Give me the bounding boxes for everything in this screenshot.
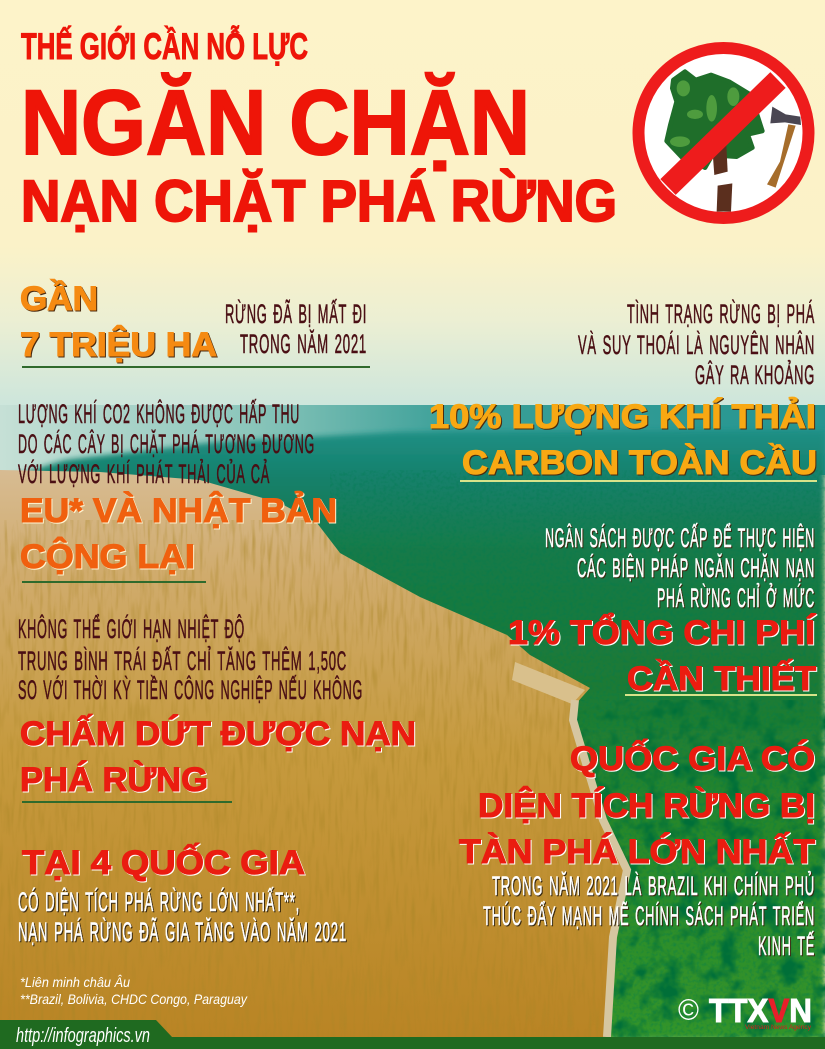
- logo: TTXVN: ©: [678, 994, 699, 1027]
- infographic canvas: NẠN PHÁ RỪNG ĐÃ GIA TĂNG VÀO NĂM 2021: [18, 916, 347, 947]
- stat: 4 countries: [18, 843, 347, 947]
- background: cleared field: [0, 460, 640, 1040]
- stat: 7 million ha: [20, 280, 370, 368]
- stat: 1 percent budget: [508, 522, 817, 698]
- stat: temperature limit: TRUNG BÌNH TRÁI ĐẤT CHỈ TĂNG THÊM 1,50C: [18, 644, 347, 676]
- title: [21, 25, 617, 234]
- stat: 7 million ha: 7 TRIỆU HA: [20, 326, 217, 364]
- stat: temperature limit: [18, 613, 416, 803]
- footnotes: *Liên minh châu Âu: [20, 974, 130, 990]
- logo: TTXVN: Vietnam News Agency: [745, 1025, 811, 1031]
- stat: Brazil: TÀN PHÁ LỚN NHẤT: [459, 833, 815, 871]
- icon: no deforestation sign: [638, 48, 808, 218]
- stat: CO2 equivalent: VỚI LƯỢNG KHÍ PHÁT THẢI CỦA CẢ: [18, 457, 270, 489]
- stat: temperature limit: PHÁ RỪNG: [20, 761, 208, 799]
- title line 3: NẠN CHẶT PHÁ RỪNG: [21, 169, 617, 234]
- stat: 7 million ha: GẦN: [20, 280, 98, 318]
- stat: 1 percent budget: CẦN THIẾT: [627, 660, 816, 698]
- logo: TTXVN: TTXVN: [709, 992, 812, 1029]
- stat: Brazil: DIỆN TÍCH RỪNG BỊ: [478, 787, 815, 825]
- stat: temperature limit: SO VỚI THỜI KỲ TIỀN CÔNG NGHIỆP NẾU KHÔNG: [18, 674, 363, 705]
- stat: Brazil: QUỐC GIA CÓ: [570, 739, 815, 778]
- background: forest: [0, 430, 825, 1040]
- footer bar: http://infographics.vn: [16, 1025, 150, 1047]
- stat: 1 percent budget: 1% TỔNG CHI PHÍ: [508, 614, 817, 652]
- stat: 4 countries: CÓ DIỆN TÍCH PHÁ RỪNG LỚN NHẤT**,: [18, 886, 300, 917]
- background: forest road: [573, 700, 627, 1037]
- title line 1: THẾ GIỚI CẦN NỖ LỰC: [21, 25, 308, 67]
- stat: 4 countries: TẠI 4 QUỐC GIA: [22, 843, 305, 882]
- stat: 7 million ha: TRONG NĂM 2021: [240, 329, 367, 359]
- stat: CO2 equivalent: LƯỢNG KHÍ CO2 KHÔNG ĐƯỢC HẤP THU: [18, 398, 300, 429]
- footnotes: **Brazil, Bolivia, CHDC Congo, Paraguay: [20, 991, 248, 1007]
- stat: CO2 equivalent: EU* VÀ NHẬT BẢN: [20, 492, 337, 530]
- background: sky: [0, 0, 825, 410]
- background: sea band: [0, 405, 825, 475]
- footnotes: [20, 974, 248, 1007]
- stat: temperature limit: KHÔNG THỂ GIỚI HẠN NHIỆT ĐỘ: [18, 613, 245, 644]
- title line 2: NGĂN CHẶN: [21, 72, 530, 174]
- stat: temperature limit: CHẤM DỨT ĐƯỢC NẠN: [20, 715, 416, 753]
- stat: 10 percent carbon: [429, 298, 817, 482]
- infographic canvas: RỪNG ĐÃ BỊ MẤT ĐI: [225, 298, 367, 329]
- stat: CO2 equivalent: CỘNG LẠI: [20, 537, 195, 576]
- stat: Brazil: [459, 739, 815, 961]
- stat: 10 percent carbon: CARBON TOÀN CẦU: [462, 444, 817, 482]
- stat: CO2 equivalent: [18, 398, 337, 583]
- infographic canvas: DO CÁC CÂY BỊ CHẶT PHÁ TƯƠNG ĐƯƠNG: [18, 428, 315, 459]
- stat: 10 percent carbon: 10% LƯỢNG KHÍ THẢI: [429, 398, 816, 436]
- footer bar: [0, 1020, 825, 1049]
